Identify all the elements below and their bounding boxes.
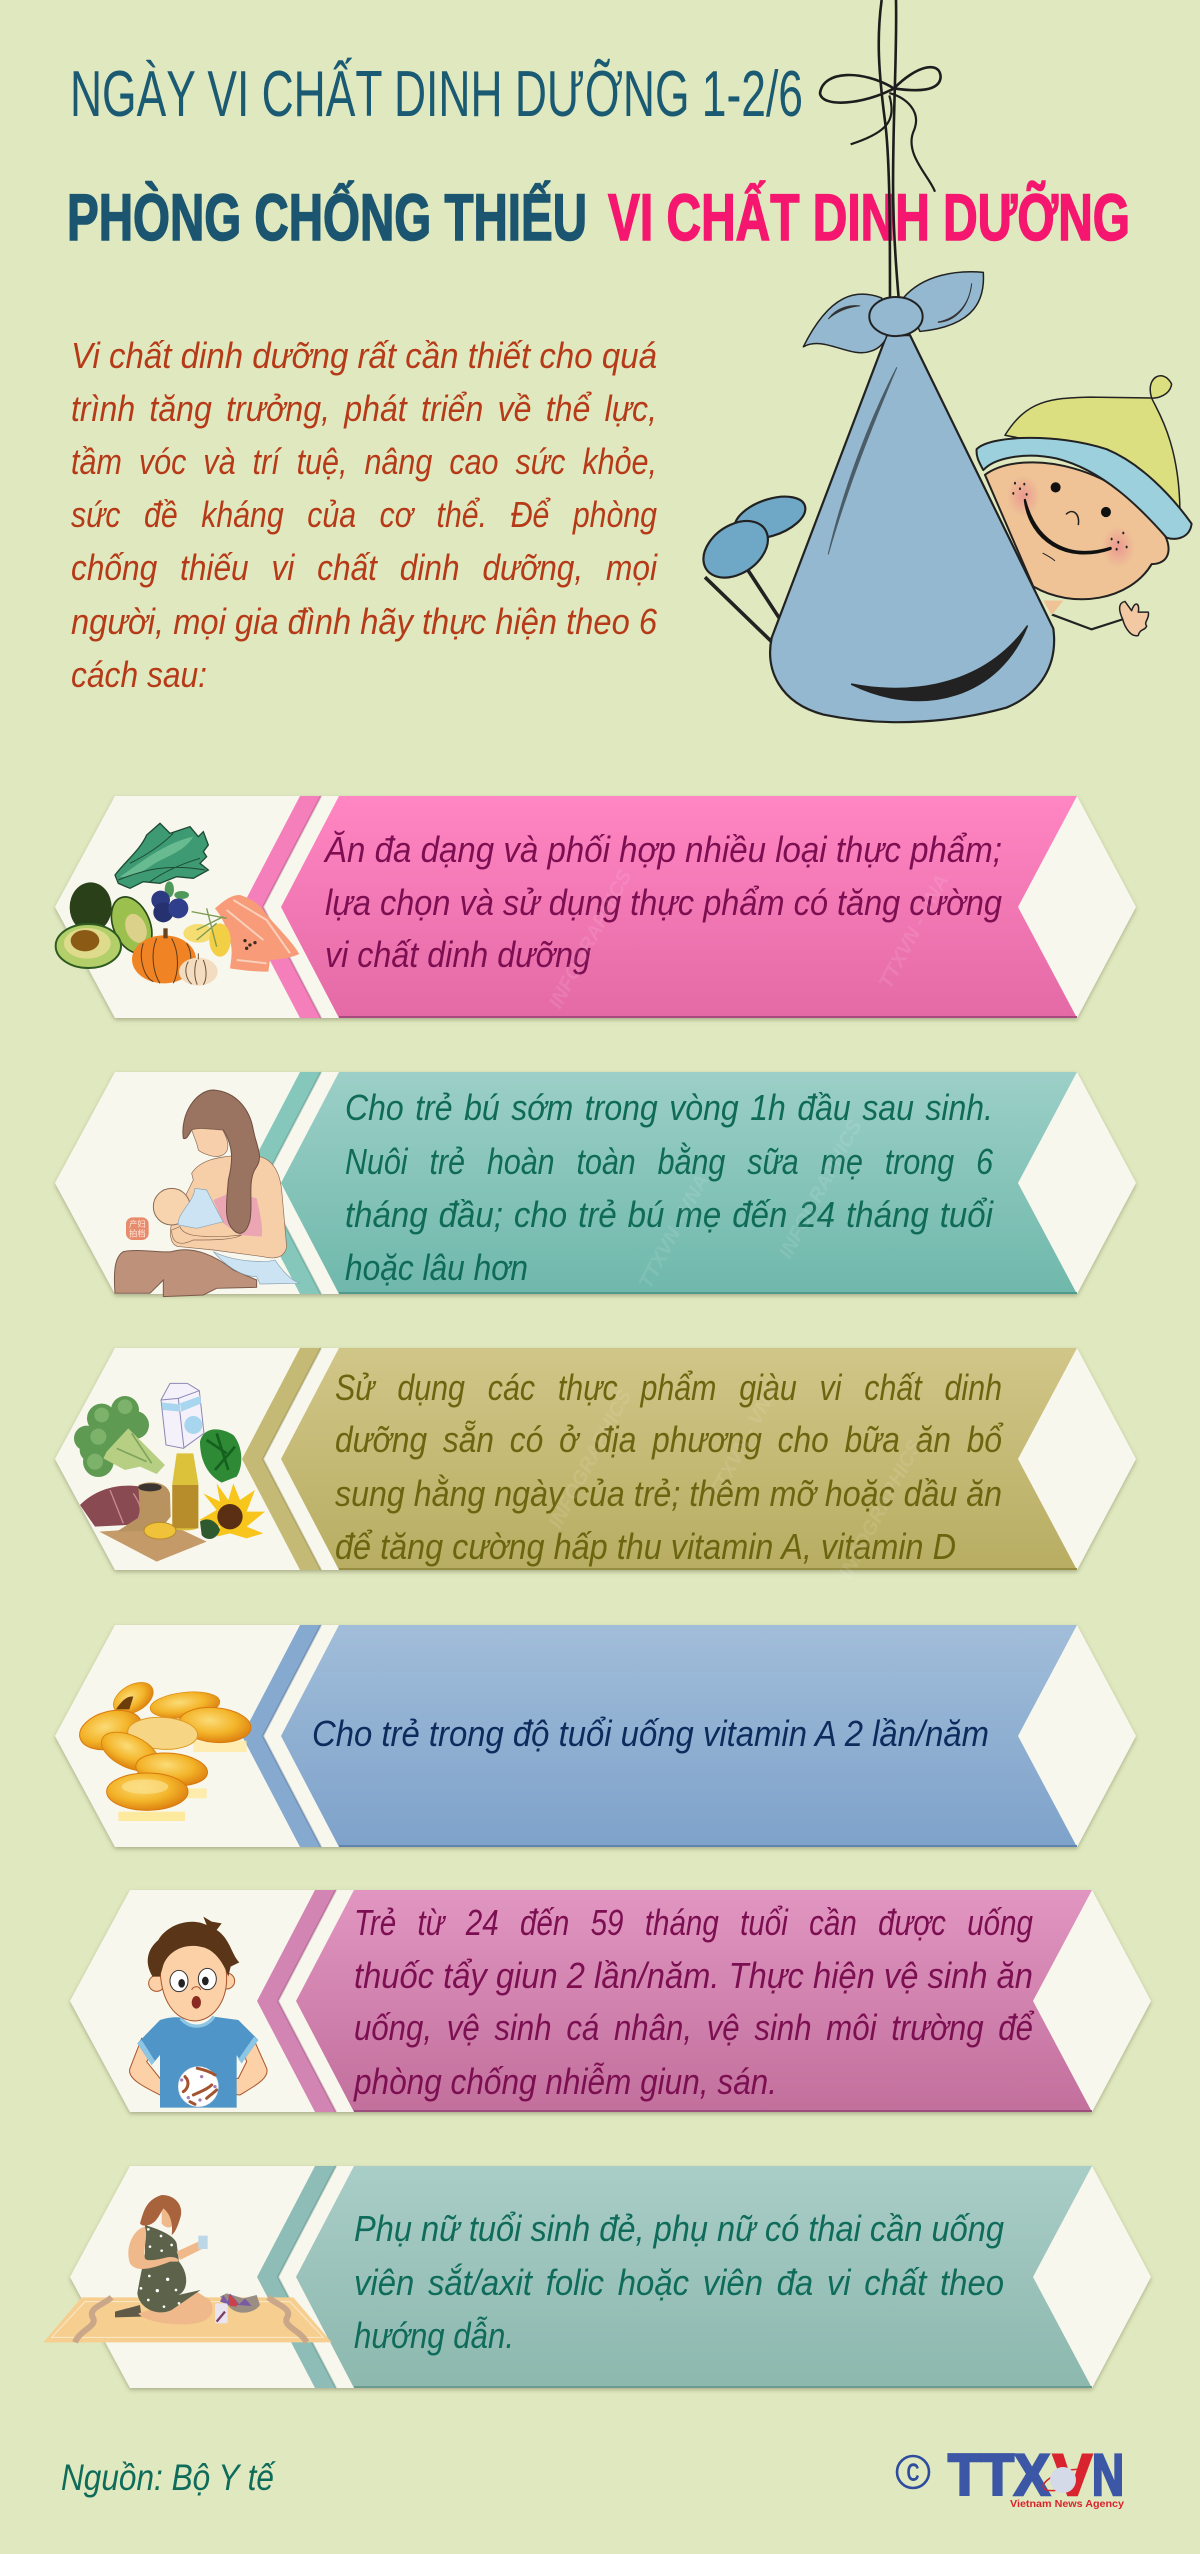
panel 3 text: dưỡng sẵn có ở địa phương cho bữa ăn bổ — [335, 1419, 1004, 1460]
panel 2: breastfeeding — [55, 1072, 1136, 1294]
watermarks: INFOGRAPHICS — [775, 1116, 867, 1262]
baby arm and hand — [1043, 600, 1149, 636]
title: event line: NGÀY VI CHẤT DINH DƯỠNG 1-2/6 — [70, 57, 803, 130]
watermarks — [545, 866, 953, 1582]
watermarks: TTXVN - VNA — [875, 871, 953, 992]
icon: boy with worms in his stomach — [130, 1917, 267, 2108]
icon: pregnant woman on a mat — [43, 2195, 332, 2342]
panel 2 text: Nuôi trẻ hoàn toàn bằng sữa mẹ trong 6 — [345, 1141, 994, 1182]
intro paragraph: sức đề kháng của cơ thể. Để phòng — [71, 494, 657, 535]
cloth bundle — [770, 272, 1054, 722]
icon: vitamin capsules — [75, 1676, 252, 1821]
panel 3 text — [335, 1367, 1004, 1567]
panel 6 text: Phụ nữ tuổi sinh đẻ, phụ nữ có thai cần uống — [354, 2208, 1004, 2249]
wordmark: V — [1053, 2443, 1092, 2508]
panel 1 text: lựa chọn và sử dụng thực phẩm có tăng cường — [325, 882, 1002, 923]
panel 6 text — [354, 2208, 1004, 2356]
icon: mother breastfeeding a baby — [114, 1090, 300, 1297]
intro paragraph: trình tăng trưởng, phát triển về thể lực, — [71, 388, 657, 429]
intro paragraph: cách sau: — [71, 654, 207, 695]
wordmark — [948, 2443, 1124, 2508]
panel 6 text: viên sắt/axit folic hoặc viên đa vi chất theo — [354, 2262, 1004, 2303]
panel 1 text: Ăn đa dạng và phối hợp nhiều loại thực phẩm; — [323, 829, 1002, 870]
panel 3: local foods — [55, 1348, 1136, 1570]
watermarks: INFOGRAPHICS — [835, 1436, 927, 1582]
strings and bow — [820, 0, 941, 298]
panel 2 text — [345, 1087, 994, 1288]
illustration: baby hanging in a blue bundle — [698, 0, 1192, 722]
baby hat — [977, 376, 1192, 539]
panel 5: deworming — [70, 1890, 1151, 2112]
wordmark: TTX — [948, 2443, 1050, 2508]
panel 5 text — [353, 1902, 1035, 2102]
source: Nguồn: Bộ Y tế — [61, 2457, 276, 2498]
stamp: 产妇 — [129, 1219, 146, 1229]
panel 1 text: vi chất dinh dưỡng — [325, 934, 591, 975]
intro paragraph — [71, 335, 658, 695]
wordmark: N — [1092, 2443, 1124, 2508]
icon: broccoli, milk, oil, meat and sunflower — [74, 1383, 265, 1562]
stamp — [126, 1217, 149, 1240]
panel 2 text: Cho trẻ bú sớm trong vòng 1h đầu sau sinh. — [345, 1087, 993, 1128]
watermarks: INFOGRAPHICS — [545, 1386, 637, 1532]
title: main heading: PHÒNG CHỐNG THIẾU — [67, 180, 587, 254]
icon: vegetables, avocado, fruit and salmon — [56, 823, 299, 986]
panel 5 text: phòng chống nhiễm giun, sán. — [353, 2061, 777, 2102]
panel 5 text: thuốc tẩy giun 2 lần/năm. Thực hiện vệ sinh ăn — [354, 1955, 1033, 1996]
intro paragraph: chống thiếu vi chất dinh dưỡng, mọi — [71, 547, 658, 588]
panel 4: vitamin A — [55, 1625, 1136, 1847]
intro paragraph: người, mọi gia đình hãy thực hiện theo 6 — [71, 601, 658, 642]
panel 1 text — [323, 829, 1002, 975]
watermarks: TTXVN - VNA — [635, 1171, 713, 1292]
legs and shoes — [698, 489, 808, 643]
watermarks: INFOGRAPHICS — [545, 866, 637, 1012]
panel 3 text: Sử dụng các thực phẩm giàu vi chất dinh — [335, 1367, 1002, 1408]
panel 2 text: hoặc lâu hơn — [345, 1247, 528, 1288]
stamp: 拍档 — [129, 1229, 146, 1239]
copyright symbol — [897, 2456, 929, 2488]
intro paragraph: Vi chất dinh dưỡng rất cần thiết cho quá — [71, 335, 657, 376]
panel 4 text: Cho trẻ trong độ tuổi uống vitamin A 2 lần/năm — [312, 1713, 989, 1754]
intro paragraph: tầm vóc và trí tuệ, nâng cao sức khỏe, — [71, 441, 657, 482]
title: main heading — [67, 180, 1130, 254]
logo: TTXVN copyright mark: Vietnam News Agency — [1010, 2498, 1124, 2510]
panel 6: women's supplements — [70, 2166, 1151, 2388]
panel 3 text: sung hằng ngày của trẻ; thêm mỡ hoặc dầu ăn — [335, 1473, 1002, 1514]
baby face — [985, 462, 1169, 599]
watermarks: TTXVN - VNA — [705, 1381, 783, 1502]
logo: TTXVN copyright mark — [897, 2443, 1124, 2510]
panel 5 text: Trẻ từ 24 đến 59 tháng tuổi cần được uống — [354, 1902, 1033, 1943]
panel 3 text: để tăng cường hấp thu vitamin A, vitamin D — [335, 1526, 956, 1567]
panel 2 text: tháng đầu; cho trẻ bú mẹ đến 24 tháng tuổi — [345, 1194, 994, 1235]
copyright symbol: C — [906, 2459, 920, 2487]
panel 6 text: hướng dẫn. — [354, 2315, 514, 2356]
panel 1: varied diet — [55, 796, 1136, 1018]
panel 5 text: uống, vệ sinh cá nhân, vệ sinh môi trường để — [354, 2007, 1035, 2048]
